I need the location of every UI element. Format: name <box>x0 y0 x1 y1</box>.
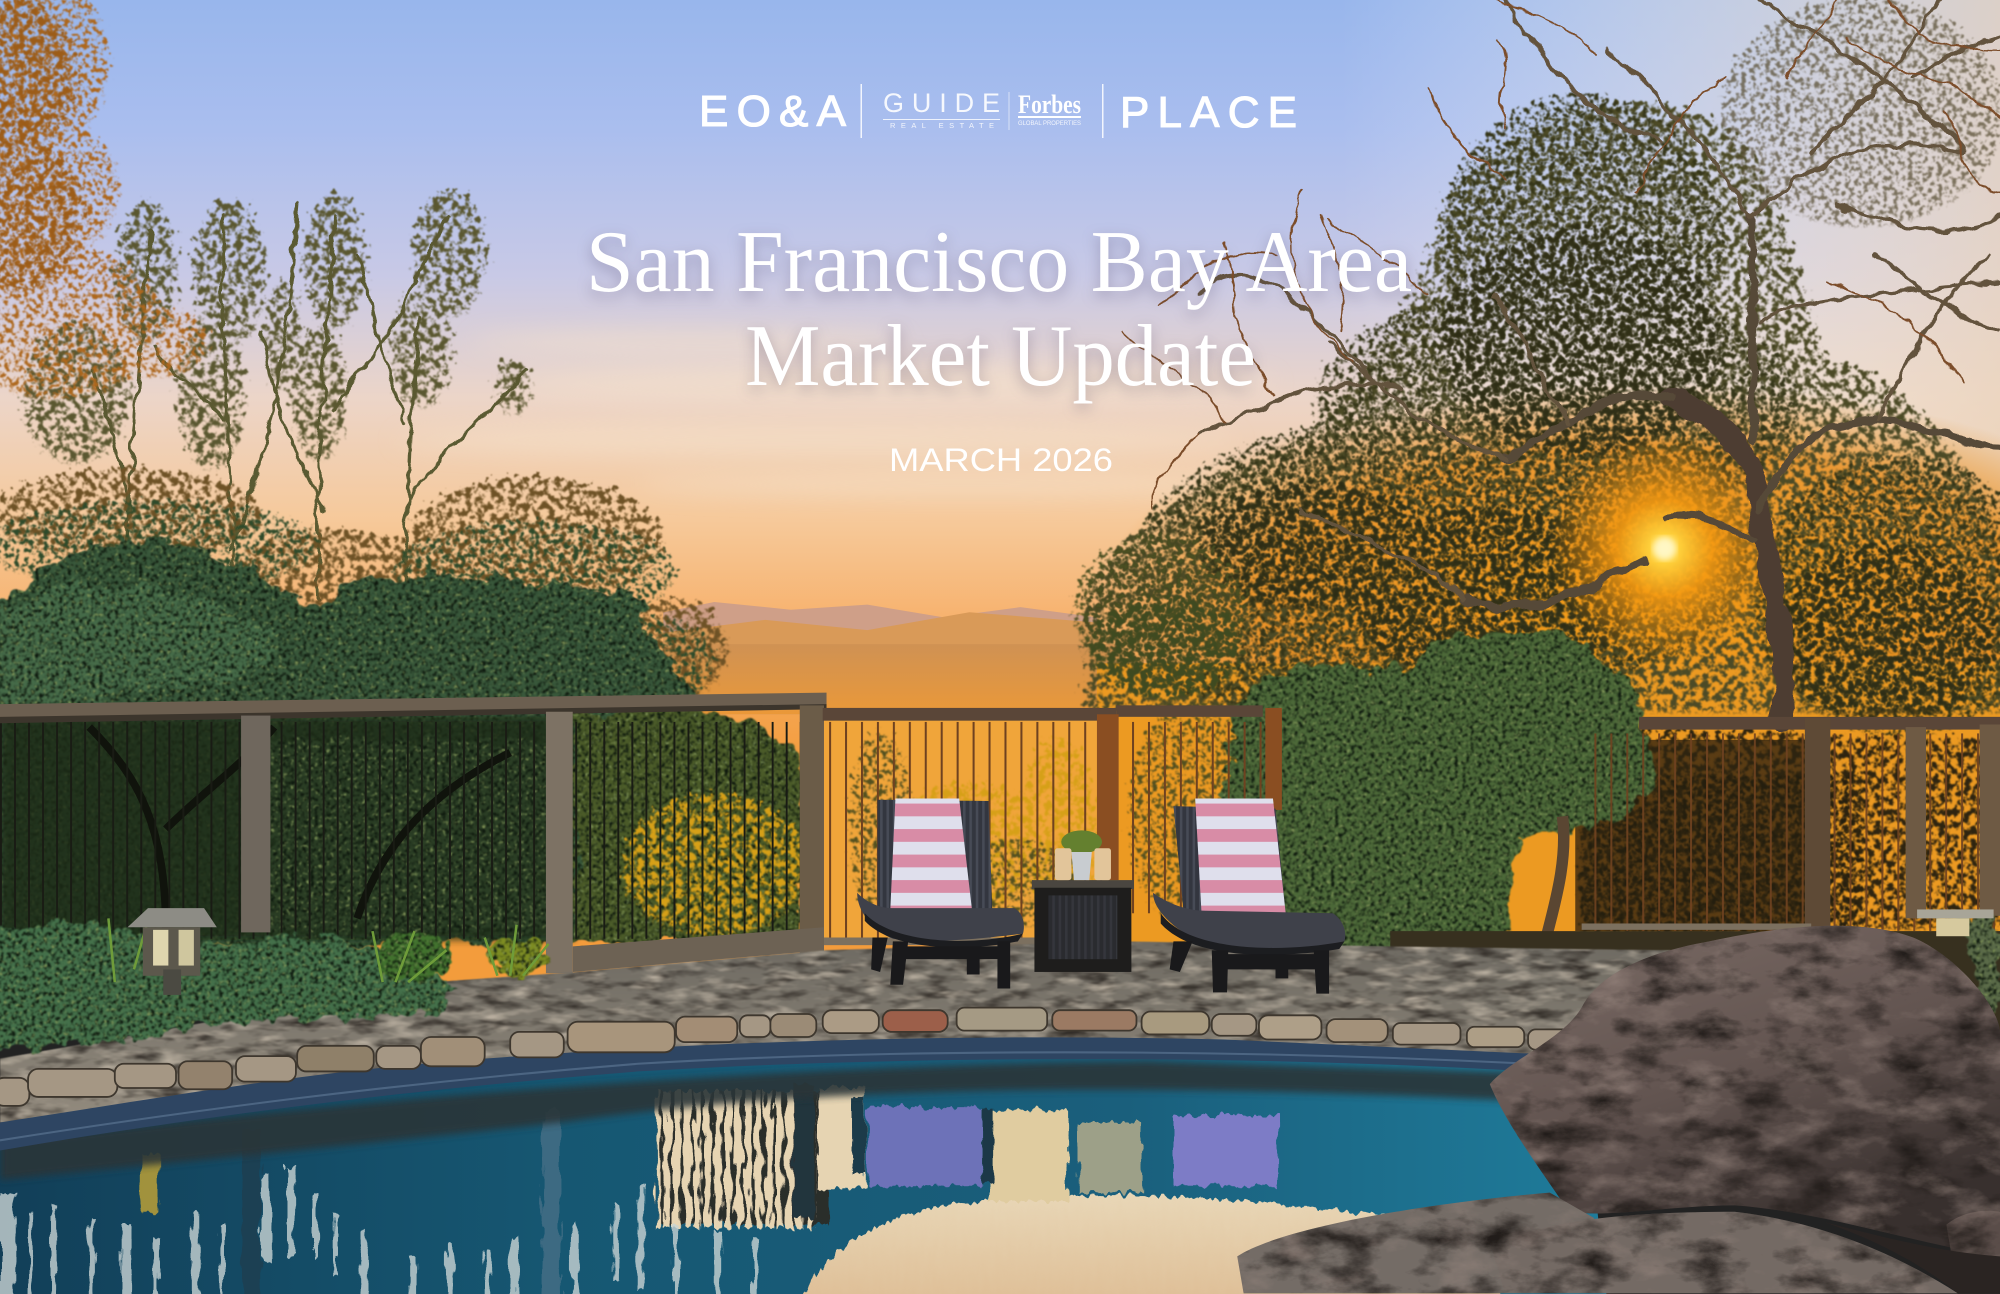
dark foliage behind right fence <box>1575 733 2000 937</box>
tree trunk and branches <box>1122 0 2000 721</box>
logo: Forbes Global Properties <box>1018 90 1082 127</box>
foreground flat rocks <box>1237 1193 2000 1293</box>
stone reflections in water <box>0 1061 1569 1180</box>
distant hills <box>663 602 1122 714</box>
title: San Francisco Bay Area <box>586 214 1412 311</box>
stone patio <box>0 941 1671 1122</box>
title: Market Update <box>745 308 1256 405</box>
pool tile band <box>0 1037 1531 1151</box>
logo: Forbes Global Properties: Forbes <box>1018 90 1081 119</box>
lounge chair, right <box>1153 798 1345 994</box>
garden lamp <box>128 908 217 995</box>
logo inner divider <box>1008 92 1010 130</box>
logo divider right <box>1102 84 1104 138</box>
bush trunk <box>1543 816 1564 950</box>
fence, left section <box>0 693 827 973</box>
ground behind boulder <box>1390 931 2000 1084</box>
water reflections <box>0 1084 1531 1294</box>
logo: Guide Real Estate: REAL ESTATE <box>890 121 994 130</box>
plant and candles <box>1055 830 1111 880</box>
lounge chair, left <box>857 798 1024 989</box>
coping stones around pool <box>0 1008 1577 1106</box>
title <box>586 214 1412 405</box>
gap behind flat rocks <box>1824 1222 2000 1293</box>
side table <box>1032 880 1134 972</box>
orange leaves, top left <box>0 0 209 402</box>
logo: Guide Real Estate: GUIDE <box>883 88 1000 118</box>
garden lamp, far right <box>1917 909 1994 936</box>
green bush, right of fence <box>1224 630 1653 950</box>
garden plants, left <box>0 918 548 1052</box>
plants behind boulder <box>1952 918 2000 1008</box>
golden foliage behind fence <box>574 702 1256 944</box>
poplar trees, left <box>23 191 531 638</box>
fence, centre section <box>823 705 1282 945</box>
sky <box>0 0 2000 995</box>
dark foliage behind left fence <box>0 717 574 940</box>
pool water <box>0 1048 1607 1294</box>
logo: EO&A: EO&A <box>699 87 847 136</box>
large oak tree foliage, right <box>1074 0 2000 740</box>
right tree backlight <box>824 383 2000 944</box>
sun flare <box>1550 434 1779 663</box>
fence, right section <box>1582 717 2000 931</box>
logo row <box>699 84 1297 138</box>
date subtitle: MARCH 2026 <box>889 442 1113 478</box>
large boulder <box>1490 926 2000 1256</box>
logo divider left <box>860 84 862 138</box>
left oak trees <box>0 471 727 944</box>
logo: Forbes Global Properties: GLOBAL PROPERTIES <box>1018 120 1082 127</box>
logo: PLACE: PLACE <box>1120 88 1297 137</box>
